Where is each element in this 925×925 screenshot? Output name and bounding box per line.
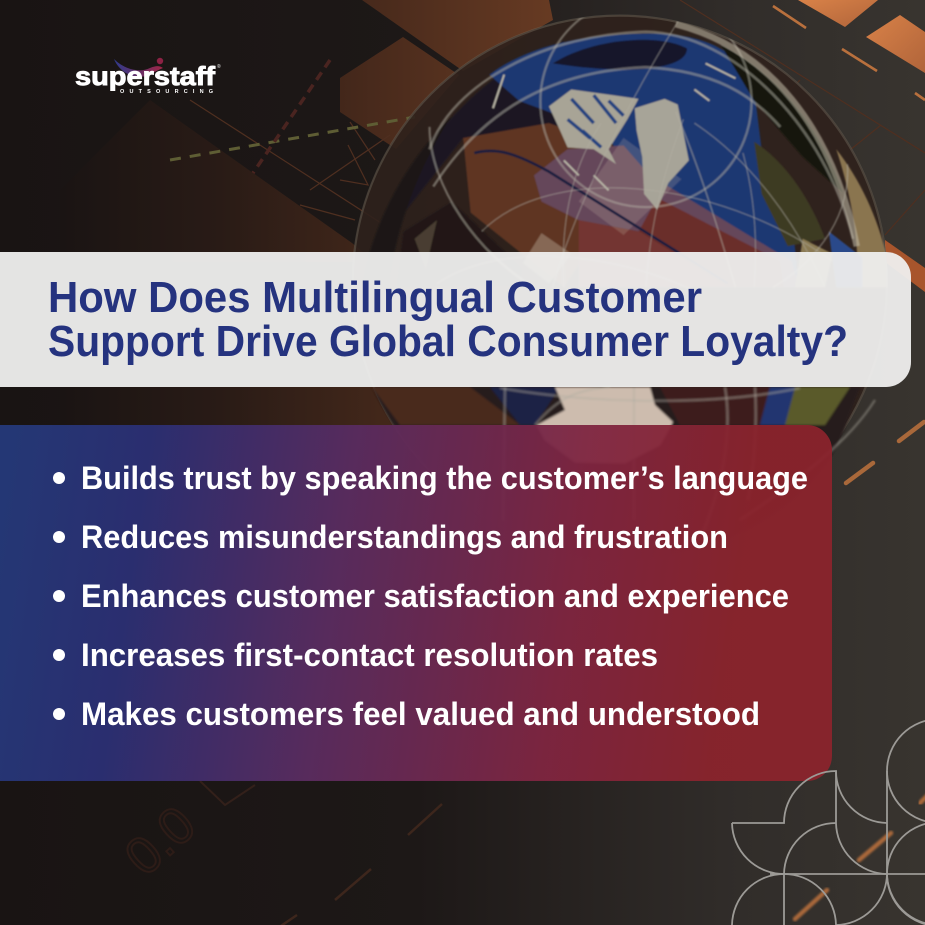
faint chart marks lower left: 0.0 (114, 795, 207, 887)
globe lower hemisphere (372, 387, 875, 560)
bullet list: Reduces misunderstandings and frustration (81, 519, 728, 555)
logo (75, 58, 221, 95)
title: How Does Multilingual Customer (48, 273, 702, 322)
greenland (635, 99, 689, 210)
reflected tile (462, 122, 612, 252)
land masses (754, 142, 825, 246)
registered mark: ® (217, 63, 221, 70)
dark earth lower left (401, 204, 505, 252)
logo wordmark: superstaff (75, 61, 215, 91)
red band (638, 200, 764, 252)
globe rim (353, 16, 887, 550)
arctic islands (549, 90, 638, 164)
logo dot (157, 58, 163, 64)
bullet list: Increases first-contact resolution rates (81, 637, 658, 673)
lilac reflection (534, 144, 778, 252)
dark ocean left (406, 41, 564, 209)
pale land blob (537, 387, 673, 463)
benefits panel (0, 425, 832, 781)
orbit rings (428, 18, 860, 252)
faint chart marks lower left (114, 781, 442, 925)
bullet list: Builds trust by speaking the customer’s language (81, 460, 808, 496)
decorative geometric line pattern (732, 719, 925, 925)
orange dashes right (795, 422, 925, 919)
globe (354, 14, 886, 431)
dark wedge (721, 45, 844, 194)
bullet list: Enhances customer satisfaction and experience (81, 578, 789, 614)
dashed chart lines (170, 60, 415, 173)
bullet list (53, 460, 808, 732)
bullet list: Makes customers feel valued and understood (81, 696, 760, 732)
logo tagline: OUTSOURCING (120, 89, 213, 95)
logo swoosh (114, 59, 163, 77)
title (48, 273, 848, 366)
title: Support Drive Global Consumer Loyalty? (48, 317, 848, 366)
title panel (0, 252, 911, 387)
polar sea (553, 40, 687, 70)
ocean (489, 32, 796, 252)
background grid tiles (60, 0, 925, 425)
